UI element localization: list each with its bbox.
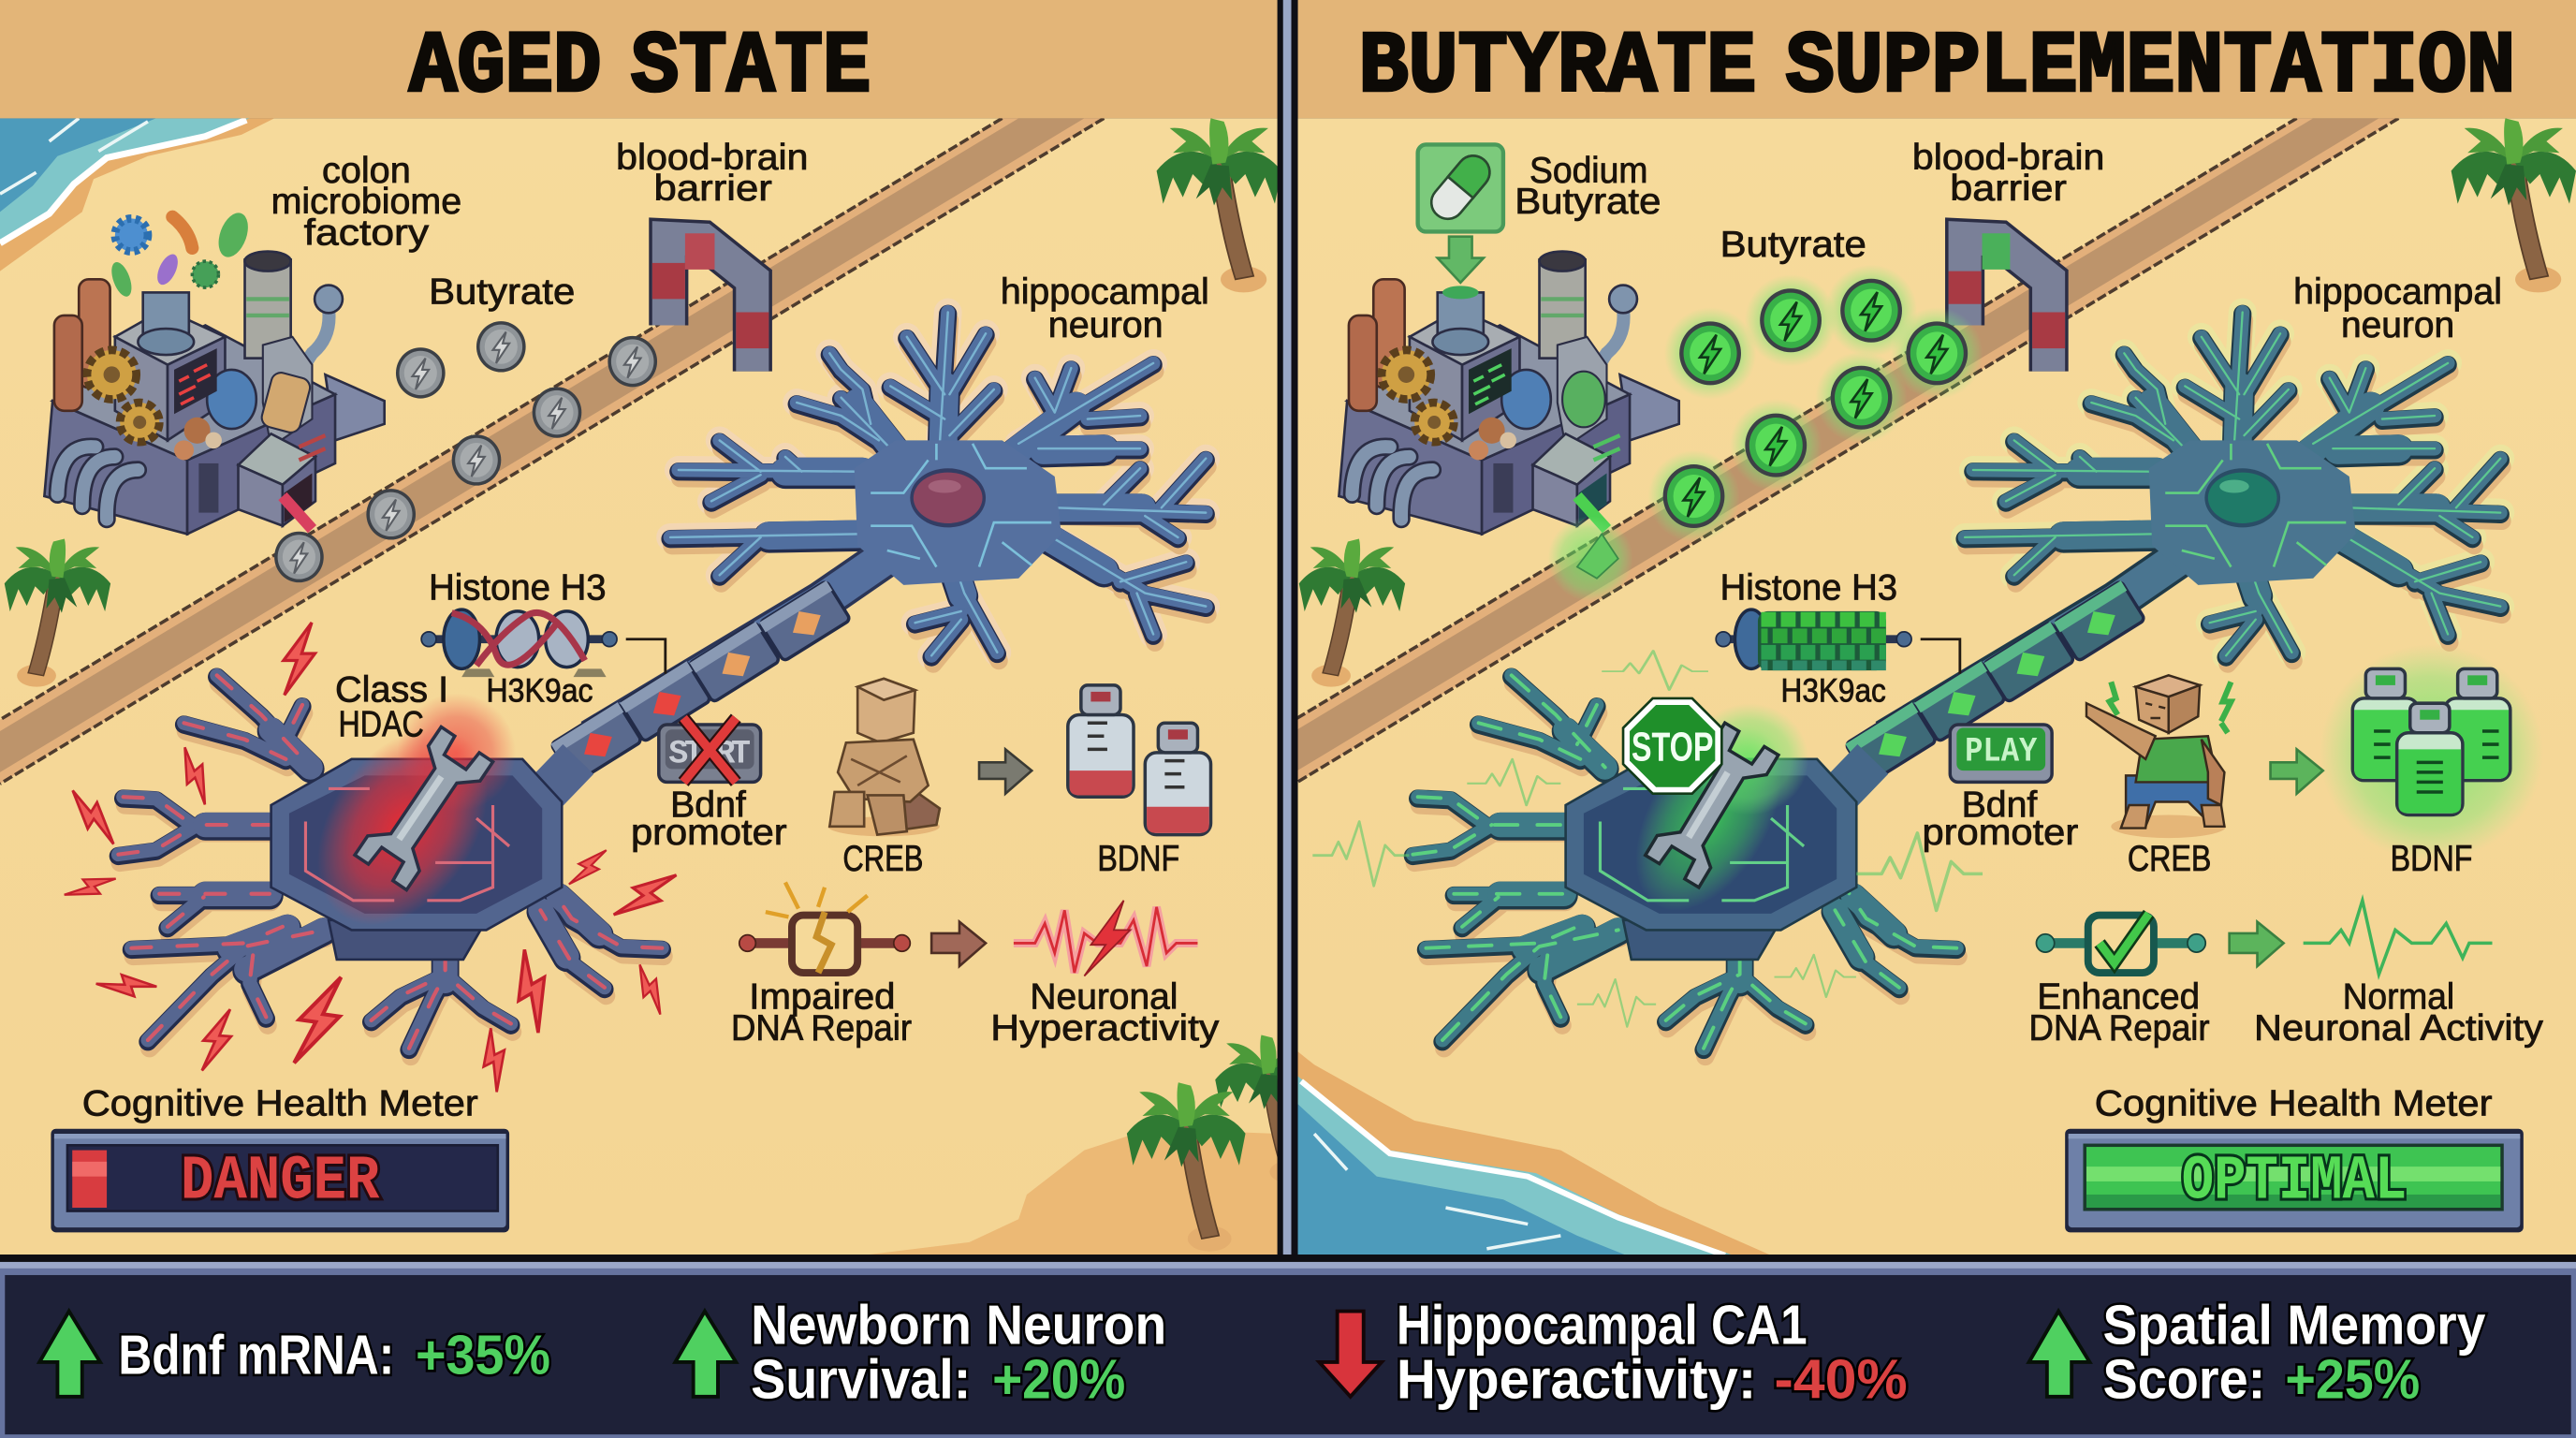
ocean: top-left shore [0, 118, 274, 271]
label: colon microbiome factory: colon [322, 151, 411, 191]
arrow: CREB to BDNF [2271, 749, 2323, 794]
palm: bottom right rear [1215, 1035, 1322, 1183]
stat: newborn neuron survival [675, 1294, 1166, 1411]
header: aged state: STATE [631, 19, 871, 117]
axon: myelin segments healthy [1845, 580, 2145, 783]
icon: neuronal hyperactivity trace [1014, 901, 1197, 976]
meter: danger [51, 1129, 509, 1232]
label: impaired DNA repair [731, 977, 912, 1049]
icon: normal neuronal activity trace [2304, 901, 2492, 975]
label: sodium butyrate [1515, 151, 1661, 222]
meter: danger: DANGER [181, 1146, 379, 1217]
palm: bottom right [1127, 1082, 1246, 1252]
panel: butyrate supplementation [1292, 118, 2576, 1255]
meter: optimal: OPTIMAL [2182, 1146, 2407, 1217]
panel: aged state [0, 118, 1322, 1255]
icon: histone with open acetylated chromatin [1716, 609, 1960, 674]
road: diagonal path [0, 118, 1104, 784]
stat: Bdnf mRNA: +35% [416, 1323, 550, 1386]
label: class I HDAC: Class I [335, 669, 448, 710]
stat: newborn neuron survival: Newborn Neuron [751, 1294, 1166, 1357]
label: enhanced DNA repair [2029, 977, 2210, 1049]
label: hippocampal neuron [2293, 272, 2502, 345]
label: colon microbiome factory [271, 151, 461, 254]
arrow: CREB to BDNF [979, 749, 1032, 794]
dunes: bottom right [862, 1129, 1278, 1255]
butyrate molecules: depleted grey [274, 321, 657, 582]
palm: left [5, 539, 110, 687]
icon: blocked Bdnf promoter start button [659, 718, 761, 782]
neuron: hippocampal upper, healthy [1886, 312, 2502, 740]
icon: inhibited HDAC wrench [1646, 723, 1778, 888]
label: Bdnf promoter: Bdnf [1962, 785, 2038, 825]
stat: spatial memory score [2029, 1294, 2485, 1411]
arrow: repair to hyperactivity [931, 922, 986, 966]
header: aged state [0, 0, 1278, 118]
icon: CREB active figure [2086, 675, 2226, 838]
meter: optimal [2065, 1129, 2524, 1232]
label: class I HDAC: HDAC [339, 704, 424, 744]
label: neuronal hyperactivity: Hyperactivity [990, 1008, 1220, 1049]
icon: blood-brain barrier arch [668, 233, 753, 372]
label: blood-brain barrier [1912, 138, 2104, 209]
palm: top right [2452, 118, 2576, 292]
stat: hippocampal CA1 hyperactivity: -40% [1775, 1348, 1908, 1411]
label: blood-brain barrier: barrier [1950, 169, 2067, 209]
header: butyrate supplementation [1298, 0, 2576, 118]
label: normal neuronal activity: Normal [2343, 977, 2454, 1018]
factory: colon microbiome [44, 252, 385, 534]
stat: spatial memory score: Score: [2103, 1348, 2265, 1411]
label: colon microbiome factory: microbiome [271, 182, 461, 222]
label: class I HDAC [335, 669, 448, 744]
label: impaired DNA repair: Impaired [749, 977, 896, 1018]
label: blood-brain barrier: blood-brain [1912, 138, 2104, 178]
label: enhanced DNA repair: Enhanced [2037, 977, 2200, 1018]
arrow: pill into factory [1438, 237, 1484, 283]
icon: histone with compact DNA [421, 609, 666, 677]
label: normal neuronal activity: Neuronal Activity [2254, 1008, 2544, 1049]
label: Bdnf promoter: promoter [631, 813, 787, 853]
icon: blocked Bdnf promoter start button: START [668, 735, 751, 772]
stat: Bdnf mRNA [39, 1312, 550, 1397]
label: blood-brain barrier [616, 138, 809, 209]
palm: top right [1157, 118, 1281, 292]
icon: CREB sitting idle [828, 679, 940, 836]
icon: blood-brain barrier arch [1965, 233, 2049, 372]
label: sodium butyrate: Sodium [1530, 151, 1647, 191]
label: cognitive health meter: Cognitive Health Meter [82, 1084, 478, 1124]
label: sodium butyrate: Butyrate [1515, 182, 1661, 222]
palm: left [1299, 539, 1405, 687]
butyrate molecules: abundant glowing [1547, 265, 1983, 601]
stat: hippocampal CA1 hyperactivity: Hyperactivity: [1397, 1348, 1756, 1411]
label: neuronal hyperactivity: Neuronal [1030, 977, 1178, 1018]
label: hippocampal neuron [1001, 272, 1209, 345]
arrow: repair to normal activity [2230, 922, 2284, 966]
stat: hippocampal CA1 hyperactivity [1319, 1294, 1908, 1411]
label: cognitive health meter: Cognitive Health Meter [2095, 1084, 2493, 1124]
icon: abundant BDNF vials [2320, 644, 2543, 861]
microbes [108, 209, 254, 300]
label: hippocampal neuron: neuron [1048, 305, 1164, 345]
label: impaired DNA repair: DNA Repair [731, 1008, 912, 1049]
icon: class I HDAC wrench [355, 726, 493, 890]
label: CREB: CREB [2128, 839, 2211, 879]
icon: impaired DNA repair broken link [739, 882, 910, 973]
faint healthy ECG traces [1312, 651, 1983, 1027]
label: colon microbiome factory: factory [304, 213, 430, 254]
label: Bdnf promoter [631, 785, 787, 853]
axon: myelin segments [550, 580, 851, 783]
divider between panels [1278, 0, 1298, 1262]
icon: Bdnf promoter play button: PLAY [1965, 733, 2038, 772]
icon: enhanced DNA repair [2036, 914, 2205, 973]
stat: spatial memory score: Spatial Memory [2103, 1294, 2485, 1357]
label: neuronal hyperactivity [990, 977, 1220, 1049]
factory: supplemented [1339, 252, 1679, 534]
label: H3K9ac: H3K9ac [487, 672, 593, 709]
neuron: HDAC-affected lower [118, 675, 664, 1057]
label: blood-brain barrier: barrier [654, 169, 772, 209]
label: enhanced DNA repair: DNA Repair [2029, 1008, 2210, 1049]
stat: hippocampal CA1 hyperactivity: Hippocampal CA1 [1397, 1294, 1808, 1357]
icon: stop sign: STOP [1632, 725, 1714, 770]
header: butyrate supplementation: SUPPLEMENTATION [1786, 19, 2515, 117]
glow: HDAC halo [1690, 703, 1808, 815]
stat: Bdnf mRNA: Bdnf mRNA: [118, 1323, 394, 1386]
label: BDNF: BDNF [2391, 839, 2472, 879]
label: Bdnf promoter [1922, 785, 2078, 853]
label: H3K9ac: H3K9ac [1781, 672, 1886, 709]
icon: sodium butyrate pill [1418, 144, 1503, 231]
neuron: hippocampal upper [592, 312, 1208, 740]
label: Bdnf promoter: Bdnf [670, 785, 746, 825]
label: histone H3: Histone H3 [1720, 568, 1897, 609]
neuron: lower, HDAC inhibited [1412, 675, 1958, 1057]
results bar [0, 1255, 2576, 1438]
stat: newborn neuron survival: +20% [992, 1348, 1125, 1411]
label: BDNF: BDNF [1097, 839, 1179, 879]
icon: stop sign [1623, 698, 1721, 794]
label: hippocampal neuron: hippocampal [1001, 272, 1209, 313]
label: hippocampal neuron: hippocampal [2293, 272, 2502, 313]
stat: spatial memory score: +25% [2285, 1348, 2420, 1411]
stat: newborn neuron survival: Survival: [751, 1348, 971, 1411]
glow: HDAC halo [398, 694, 516, 812]
label: normal neuronal activity [2254, 977, 2544, 1049]
road: diagonal path [1295, 118, 2398, 784]
lightning bolts: hyperactivity [60, 620, 681, 1093]
label: hippocampal neuron: neuron [2341, 305, 2454, 345]
label: butyrate: Butyrate [429, 272, 575, 313]
label: blood-brain barrier: blood-brain [616, 138, 809, 178]
icon: low BDNF vials [1068, 685, 1211, 835]
header: aged state: AGED [409, 19, 601, 117]
label: CREB: CREB [842, 839, 923, 879]
sparks: CREB energy [2110, 682, 2231, 733]
label: butyrate: Butyrate [1720, 225, 1866, 265]
header: butyrate supplementation: BUTYRATE [1358, 19, 1756, 117]
label: Bdnf promoter: promoter [1922, 813, 2078, 853]
icon: Bdnf promoter play button [1950, 725, 2052, 782]
ocean: bottom-left shore [1298, 1051, 1771, 1255]
label: histone H3: Histone H3 [429, 568, 607, 609]
